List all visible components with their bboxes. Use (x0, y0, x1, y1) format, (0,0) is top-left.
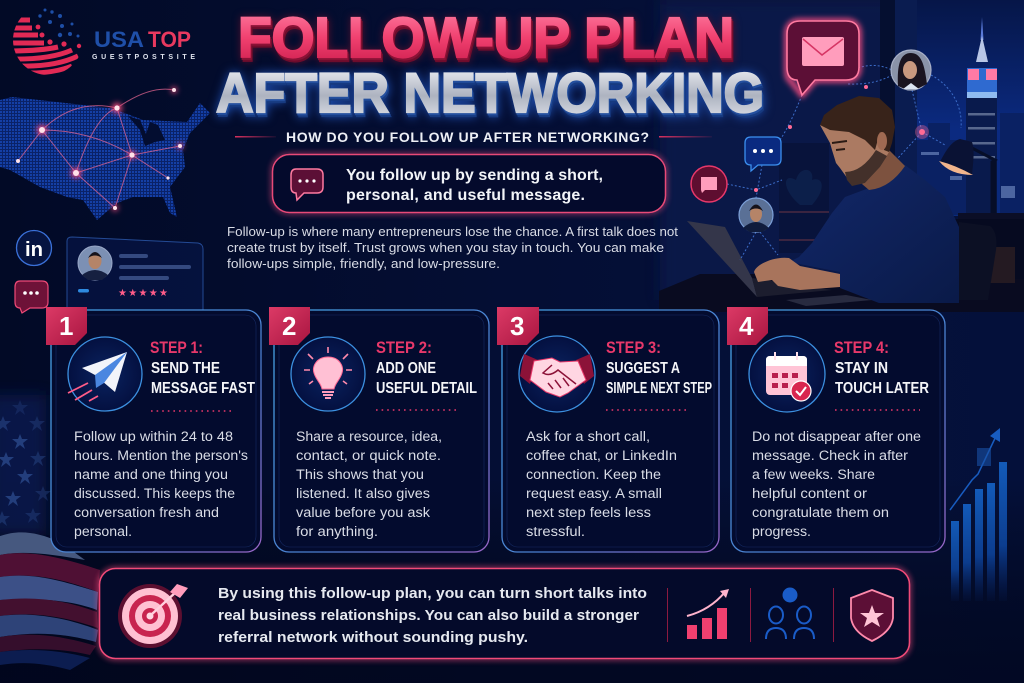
icon: light bulb (291, 337, 365, 411)
badge 3 (497, 307, 539, 345)
chair (955, 222, 996, 300)
profile avatar (78, 246, 112, 280)
american flag backdrop (0, 395, 100, 670)
step 4 body: progress. (752, 524, 811, 539)
step 3 body: stressful. (526, 524, 585, 539)
badge 1: 1 (59, 311, 73, 341)
step 2 heading: STEP 2: (376, 339, 432, 357)
notebook on desk (786, 295, 872, 306)
title (216, 6, 764, 124)
icon: linkedin: in (25, 239, 43, 261)
step 1 heading: MESSAGE FAST (151, 380, 255, 397)
intro paragraph (227, 224, 678, 271)
network nodes (754, 85, 929, 192)
title: FOLLOW-UP PLAN (238, 6, 734, 70)
desk lamp (939, 139, 995, 213)
man at laptop (659, 96, 1024, 312)
step 2 body (296, 429, 442, 539)
step 3 heading (606, 339, 712, 397)
us network map (0, 87, 210, 220)
step 1 heading: STEP 1: (150, 339, 203, 357)
logo wordmark: USA (94, 27, 144, 52)
eye and brow (832, 141, 847, 150)
step 2 heading: USEFUL DETAIL (376, 380, 477, 397)
step card 4 (727, 307, 945, 552)
great lakes (128, 116, 165, 146)
step card 3 (497, 307, 719, 552)
rating stars: ★★★★★ (118, 288, 168, 299)
step 2 body: contact, or quick note. (296, 448, 441, 463)
step 3 heading: SIMPLE NEXT STEP (606, 380, 712, 397)
logo wordmark: TOP (148, 27, 191, 52)
icon: team (766, 588, 814, 639)
logo wordmark (92, 27, 195, 61)
network connection lines (727, 65, 961, 260)
badge 3: 3 (510, 311, 524, 341)
beard (845, 150, 887, 186)
step 2 body: listened. It also gives (296, 486, 430, 501)
skyline (917, 113, 1024, 215)
step 3 heading: STEP 3: (606, 339, 661, 357)
hair (820, 96, 895, 152)
banner text: real business relationships. You can also build a stronger (218, 608, 639, 624)
icon: chat bubble (291, 169, 323, 200)
badge 4: 4 (739, 311, 754, 341)
icon: pink message circle (691, 166, 727, 202)
step 3 body: next step feels less (526, 505, 651, 520)
step 1 heading: SEND THE (151, 360, 220, 377)
answer callout: personal, and useful message. (346, 187, 585, 204)
desk (659, 274, 1024, 312)
icon: blue chat bubble (745, 137, 781, 171)
step 3 body: connection. Keep the (526, 467, 661, 482)
badge 2: 2 (282, 311, 296, 341)
step 2 heading: ADD ONE (376, 360, 436, 377)
banner text: By using this follow-up plan, you can turn short talks into (218, 586, 647, 602)
step 1 body: hours. Mention the person's (74, 448, 248, 463)
step 1 body: name and one thing you (74, 467, 228, 482)
step 3 heading: SUGGEST A (606, 360, 680, 377)
step 4 heading: TOUCH LATER (835, 380, 929, 397)
step 2 body: for anything. (296, 524, 378, 539)
city window scene (880, 0, 1024, 230)
intro paragraph: create trust by itself. Trust grows when you stay in touch. You can make (227, 240, 664, 255)
face (820, 118, 889, 185)
step 1 body: personal. (74, 524, 132, 539)
step 1 body (74, 429, 248, 539)
icon: paper plane (68, 337, 142, 411)
answer callout: You follow up by sending a short, (346, 167, 603, 184)
growth bar chart backdrop (950, 428, 1007, 601)
subheading: HOW DO YOU FOLLOW UP AFTER NETWORKING? (286, 129, 649, 145)
step 4 body: Do not disappear after one (752, 429, 921, 444)
intro paragraph: follow-ups simple, friendly, and low-pressure. (227, 256, 500, 271)
step 3 body: request easy. A small (526, 486, 662, 501)
conclusion banner (100, 568, 910, 658)
icon: mail bubble (787, 21, 859, 95)
banner text: referral network without sounding pushy. (218, 630, 528, 646)
step 1 heading (150, 339, 255, 397)
icon: target (118, 584, 188, 648)
logo wordmark: GUESTPOSTSITE (92, 54, 195, 61)
step 1 body: Follow up within 24 to 48 (74, 429, 233, 444)
logo (8, 8, 195, 73)
map routes (18, 89, 180, 208)
step 4 heading: STAY IN (835, 360, 888, 377)
step 4 body: helpful content or (752, 486, 868, 501)
intro paragraph: Follow-up is where many entrepreneurs lose the chance. A first talk does not (227, 224, 678, 239)
sweater (789, 165, 959, 303)
avatar: woman (891, 50, 931, 90)
step 1 body: conversation fresh and (74, 505, 219, 520)
icon: shield star (851, 590, 893, 641)
step 4 heading (834, 339, 929, 397)
step 2 body: Share a resource, idea, (296, 429, 442, 444)
banner text (218, 586, 647, 646)
icon: calendar (749, 336, 825, 412)
icon: handshake (519, 336, 595, 412)
ear (877, 132, 887, 150)
empire state building (966, 17, 997, 216)
step 3 body: Ask for a short call, (526, 429, 650, 444)
step card 2 (269, 307, 489, 552)
laptop (687, 221, 757, 297)
hands (754, 258, 840, 290)
icon: side chat bubble (15, 281, 48, 313)
shelf and plant (779, 143, 829, 253)
icon: growth bars (687, 589, 729, 639)
avatar: man (739, 198, 773, 232)
step 2 heading (376, 339, 477, 397)
step 3 body: coffee chat, or LinkedIn (526, 448, 677, 463)
step 4 body: message. Check in after (752, 448, 909, 463)
step 4 body: congratulate them on (752, 505, 889, 520)
badge 4 (727, 307, 768, 345)
badge 1 (46, 307, 87, 345)
step 4 body (752, 429, 921, 539)
step 4 heading: STEP 4: (834, 339, 889, 357)
step card 1 (46, 307, 261, 552)
step 3 body (526, 429, 677, 539)
step 4 body: a few weeks. Share (752, 467, 875, 482)
badge 2 (269, 307, 310, 345)
step 1 body: discussed. This keeps the (74, 486, 235, 501)
step 2 body: This shows that you (296, 467, 424, 482)
neck (862, 150, 905, 190)
title: AFTER NETWORKING (216, 61, 764, 124)
answer callout (272, 154, 666, 212)
logo globe (8, 8, 81, 73)
step 2 body: value before you ask (296, 505, 430, 520)
icon: linkedin (16, 230, 52, 266)
map nodes (16, 87, 183, 211)
profile card (67, 237, 203, 310)
